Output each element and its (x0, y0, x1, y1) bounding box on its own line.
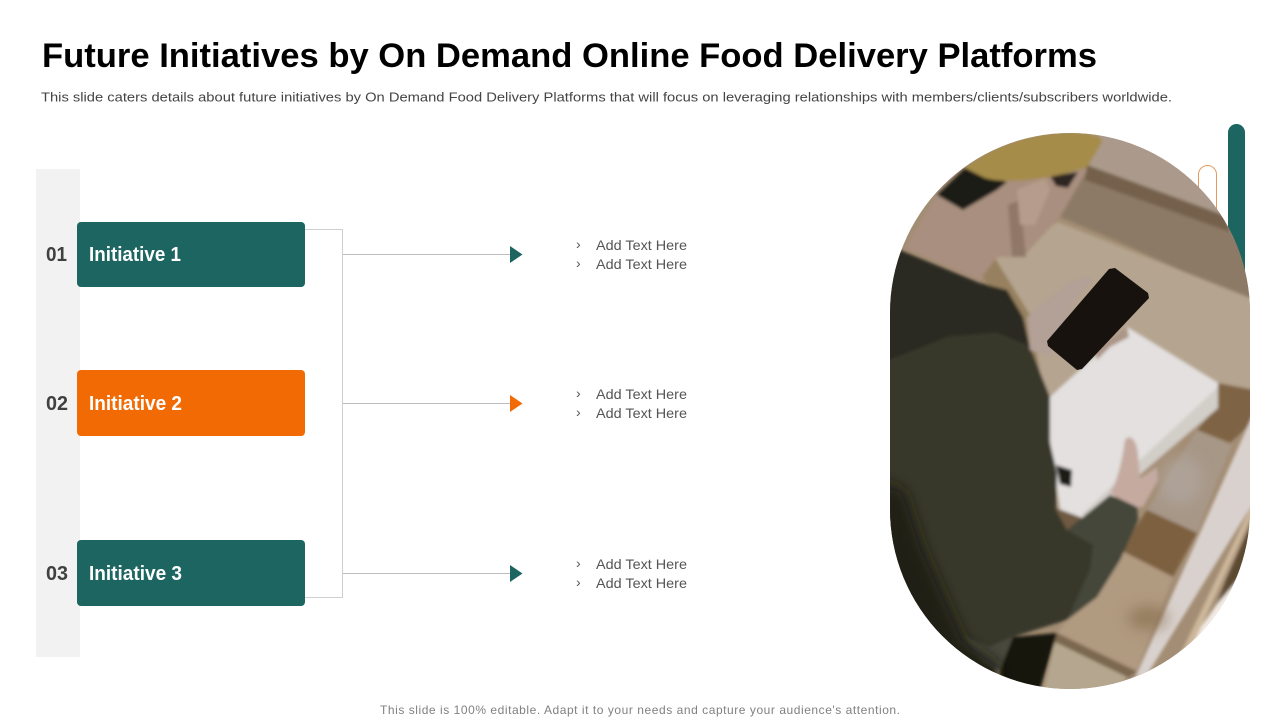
phone (1047, 268, 1149, 370)
lower hand (1110, 437, 1158, 507)
text list: initiative 2: Add Text Here (596, 386, 687, 402)
harness over the upper back (885, 250, 1030, 362)
box (1050, 327, 1218, 520)
decorative orange outline pill (1198, 166, 1216, 276)
sweater shoulder and torso (890, 331, 1095, 674)
subtitle: This slide caters details about future initiatives by On Demand Food Delivery Platforms that will focus on leveraging relationships with members/clients/subscribers worldwide. (41, 90, 1172, 104)
text list: initiative 1: › (576, 255, 581, 271)
text list: initiative 3: Add Text Here (596, 575, 687, 591)
box: initiative 3 (77, 540, 305, 606)
text list: initiative 2: Add Text Here (596, 405, 687, 421)
text list: initiative 3 (576, 555, 687, 591)
text list: initiative 2 (576, 385, 687, 421)
box: initiative 1: Initiative 1 (89, 244, 181, 266)
bracket connector (305, 230, 342, 598)
number 03: 03 (46, 563, 68, 585)
text list: initiative 3: › (576, 555, 581, 571)
sleeve (1067, 495, 1138, 620)
row: initiative 1 (46, 222, 687, 287)
neck and face (905, 168, 1087, 280)
upper stairs (1086, 134, 1231, 232)
arrow: initiative 1 (343, 246, 522, 263)
box: initiative 2 (77, 370, 305, 436)
text list: initiative 3: Add Text Here (596, 556, 687, 572)
beyond the handrail (1192, 577, 1236, 640)
hand behind phone (1025, 314, 1039, 354)
cap (965, 132, 1102, 181)
box: initiative 3: Initiative 3 (89, 563, 182, 585)
box: initiative 1 (77, 222, 305, 287)
stair and sweater shading (890, 454, 1201, 677)
handrail (1135, 410, 1255, 678)
photo: courier checking phone while holding a box (880, 125, 1255, 700)
fingers beside phone (1095, 327, 1129, 360)
text list: initiative 2: › (576, 404, 581, 420)
number strip (36, 169, 80, 657)
arrow: initiative 2 (343, 395, 522, 412)
hair (937, 168, 1007, 210)
row: initiative 3 (46, 540, 687, 606)
box tag (1056, 465, 1072, 487)
title: Future Initiatives by On Demand Online Food Delivery Platforms (42, 37, 1097, 75)
text list: initiative 3: › (576, 574, 581, 590)
lower hem and leg (962, 635, 1013, 670)
number 01: 01 (46, 244, 67, 266)
number 02: 02 (46, 393, 68, 415)
text list: initiative 2: › (576, 385, 581, 401)
box: initiative 2: Initiative 2 (89, 393, 182, 415)
decorative teal pill (1228, 124, 1245, 324)
lower stairs (1147, 430, 1232, 533)
text list: initiative 1: Add Text Here (596, 256, 687, 272)
footer note: This slide is 100% editable. Adapt it to your needs and capture your audience's attention. (380, 703, 900, 717)
text list: initiative 1: Add Text Here (596, 237, 687, 253)
text list: initiative 1: › (576, 236, 581, 252)
arrow: initiative 3 (343, 565, 522, 582)
row: initiative 2 (46, 370, 687, 436)
text list: initiative 1 (576, 236, 687, 272)
